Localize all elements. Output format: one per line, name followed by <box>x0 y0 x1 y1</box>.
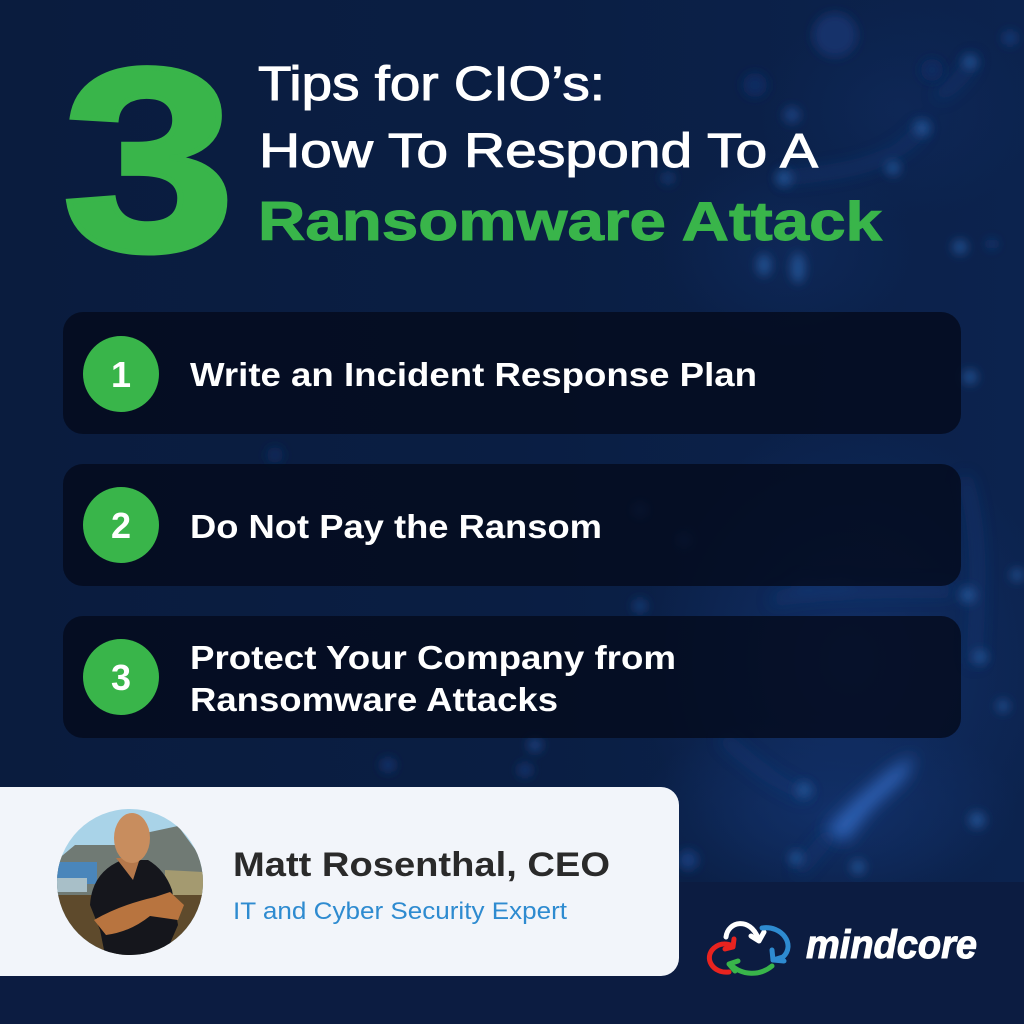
tip 2 text: Do Not Pay the Ransom <box>190 508 602 545</box>
wordmark: mindcore <box>806 923 977 967</box>
tip 2 number: 2 <box>111 505 131 546</box>
title line 3: Ransomware Attack <box>258 190 882 252</box>
title line 1: Tips for CIO’s: <box>258 58 605 111</box>
logo: mindcore <box>709 923 977 973</box>
tip 3 text: Protect Your Company from <box>190 639 676 676</box>
tip 1 number <box>83 336 159 412</box>
author photo <box>57 809 203 955</box>
author role: IT and Cyber Security Expert <box>233 898 567 925</box>
tip 3 number <box>83 639 159 715</box>
bottom footer band <box>0 882 1024 1024</box>
panel: tip 3 <box>63 616 961 738</box>
panel: tip 1 <box>63 312 961 434</box>
icon: cloud of arrows <box>709 924 788 973</box>
tip 1 text: Write an Incident Response Plan <box>190 356 757 393</box>
tip 3 text <box>190 639 676 718</box>
title <box>258 58 882 252</box>
tip 2 number <box>83 487 159 563</box>
author name: Matt Rosenthal, CEO <box>233 846 610 884</box>
tip 3 number: 3 <box>111 657 131 698</box>
panel: author card <box>0 787 679 976</box>
tip 3 text: Ransomware Attacks <box>190 681 558 718</box>
title line 2: How To Respond To A <box>259 125 818 178</box>
tip 1 number: 1 <box>111 354 131 395</box>
big number 3: 3 <box>62 14 236 305</box>
panel: tip 2 <box>63 464 961 586</box>
